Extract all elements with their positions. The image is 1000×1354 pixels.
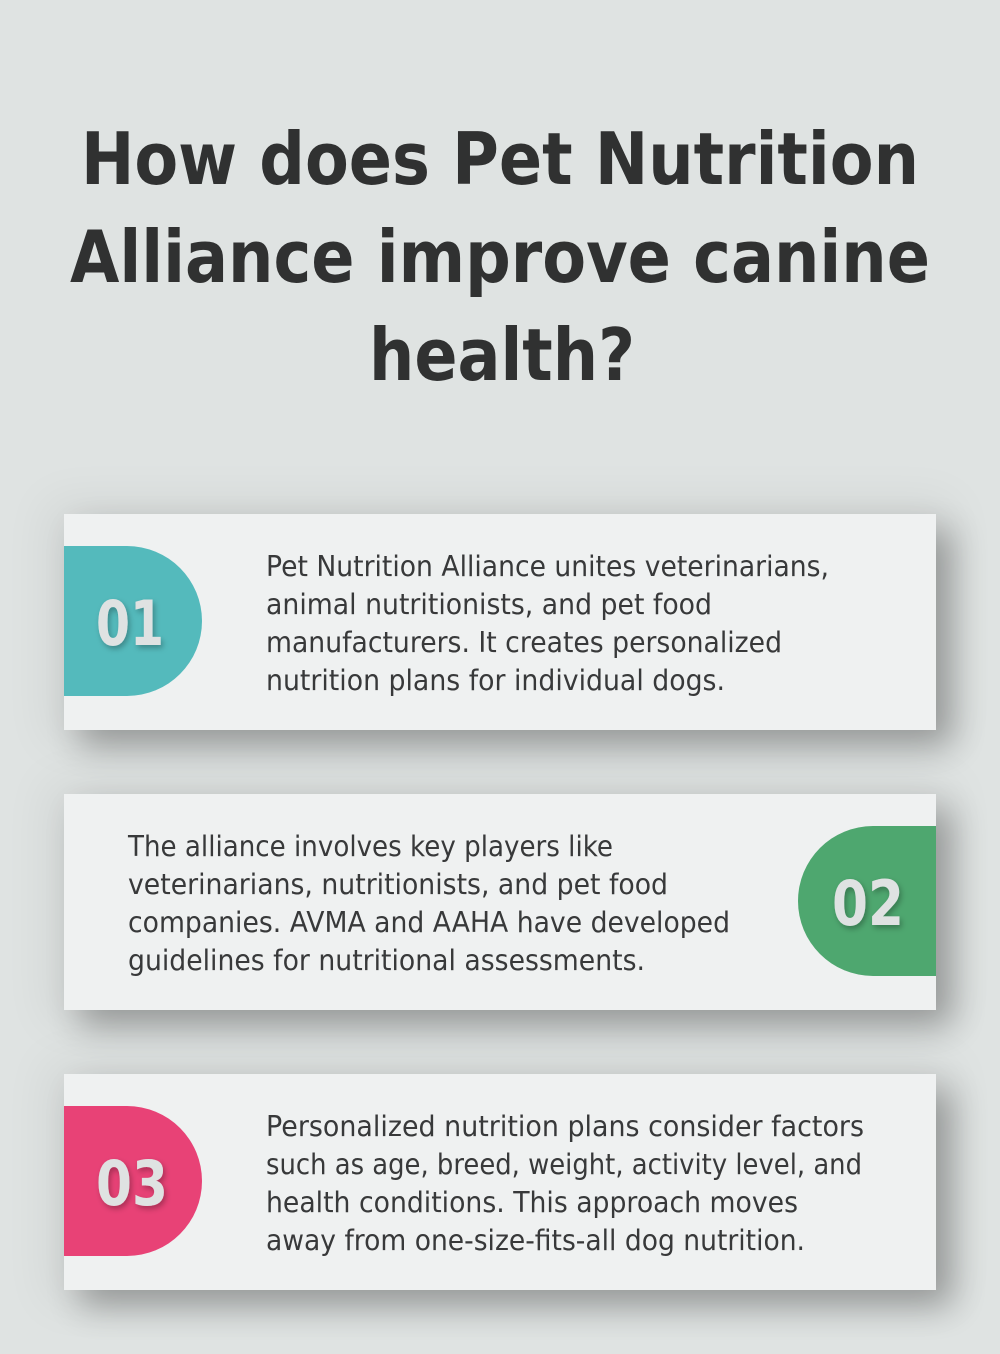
badge: 03	[64, 1106, 202, 1256]
panel: step 02	[46, 780, 954, 1026]
panel: step 01	[46, 500, 954, 746]
title: health?	[369, 313, 635, 397]
text: step 02 description: companies. AVMA and AAHA have developed	[128, 906, 730, 939]
text: step 03 description: Personalized nutrition plans consider factors	[266, 1110, 864, 1143]
badge: 01: 01	[96, 587, 164, 660]
text: step 03 description	[266, 1110, 864, 1257]
text: step 01 description: animal nutritionists, and pet food	[266, 588, 712, 621]
badge: 02: 02	[832, 867, 904, 940]
title: How does Pet Nutrition	[81, 117, 919, 201]
badge: 03: 03	[96, 1147, 168, 1220]
text: step 03 description: such as age, breed, weight, activity level, and	[266, 1148, 862, 1181]
title	[70, 117, 930, 397]
badge: 01	[64, 546, 202, 696]
panel: step 03	[46, 1060, 954, 1306]
text: step 03 description: health conditions. This approach moves	[266, 1186, 798, 1219]
text: step 02 description: veterinarians, nutritionists, and pet food	[128, 868, 668, 901]
text: step 01 description: manufacturers. It creates personalized	[266, 626, 782, 659]
text: step 01 description	[266, 550, 829, 697]
text: step 01 description: Pet Nutrition Alliance unites veterinarians,	[266, 550, 829, 583]
text: step 03 description: away from one-size-fits-all dog nutrition.	[266, 1224, 805, 1257]
text: step 01 description: nutrition plans for individual dogs.	[266, 664, 725, 697]
text: step 02 description: guidelines for nutritional assessments.	[128, 944, 645, 977]
badge: 02	[798, 826, 936, 976]
text: step 02 description	[127, 830, 730, 977]
text: step 02 description: The alliance involves key players like	[127, 830, 613, 863]
